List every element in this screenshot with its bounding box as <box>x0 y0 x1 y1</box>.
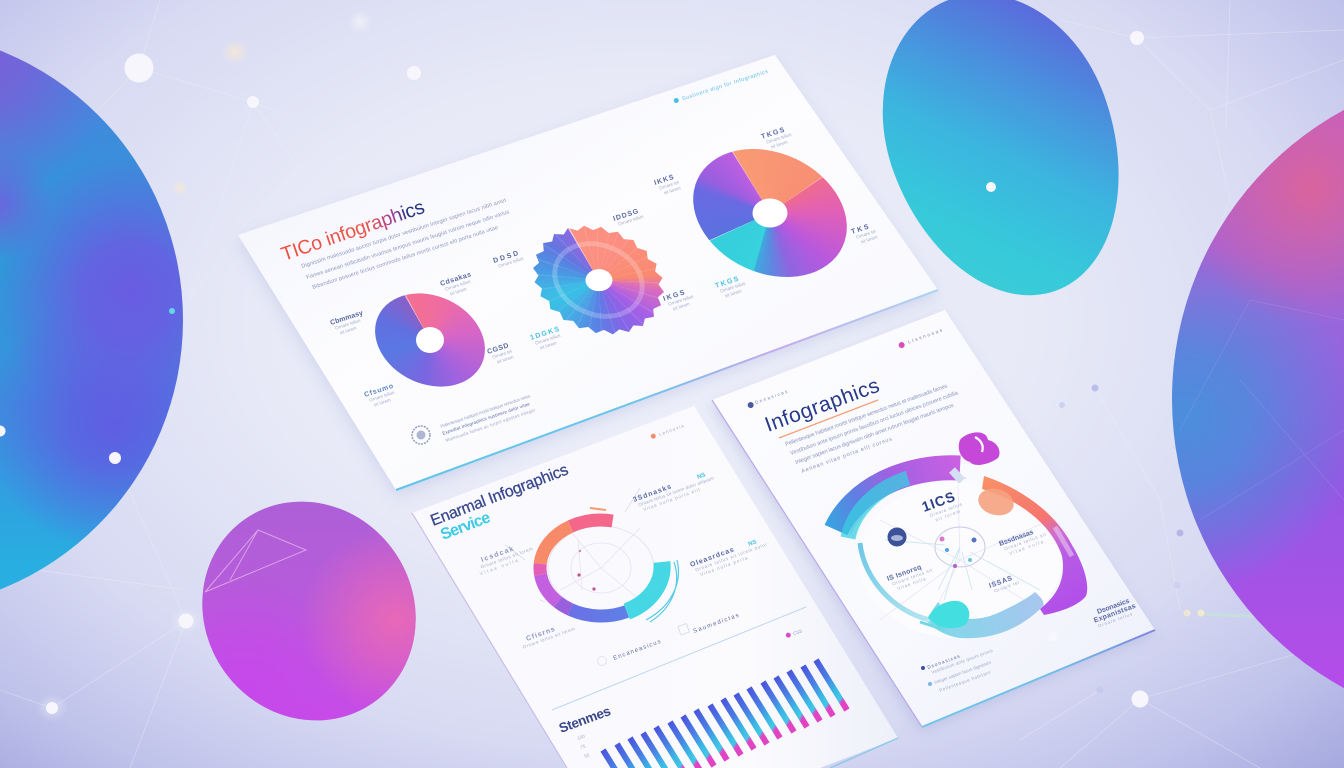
pie chart two burst <box>533 226 664 334</box>
label: pie one right: CGSD <box>486 342 510 356</box>
heading: Service <box>438 509 493 544</box>
label: donut right: Oleasrdcas <box>689 547 735 569</box>
label: pie three top <box>760 125 795 151</box>
label: pie one top: Ornare tellus <box>444 279 472 292</box>
blob: bottom-left magenta ellipse <box>202 502 416 720</box>
icon: purple blob <box>959 432 1000 465</box>
top note <box>898 327 944 349</box>
legend row: Saumedictas <box>693 613 740 635</box>
label: donut right: Ornare tellus sit lorem dolor <box>695 542 768 573</box>
label: donut left: Vitae nulla <box>479 558 519 576</box>
ring label: left: Vitae nulla <box>896 576 927 591</box>
label: pie three left: IKKS <box>653 174 675 187</box>
panel sheet <box>712 310 1155 727</box>
ring label: bottom <box>988 573 1020 595</box>
small kicker: Dnnasicas <box>754 389 789 405</box>
label: pie three top: sit lorem <box>770 139 788 150</box>
intro text: Dignissim malesuada auctor turpis dolor vestibulum integer sapien lacus nibh amet <box>301 198 508 270</box>
label: pie two right: Ornare tellus <box>667 294 695 307</box>
label: pie three top: Ornare tellus <box>765 132 793 145</box>
hub icons <box>940 536 976 568</box>
blob: top-right teal ellipse <box>845 0 1161 329</box>
footer text: Expediat Infographics sustinere dolor vitae <box>442 401 531 436</box>
label: pie three left <box>653 173 681 197</box>
blob: left blue-purple circle <box>0 30 183 610</box>
label: pie one bottom: Cfsumo <box>363 383 394 399</box>
label: pie one bottom: sit lorem <box>373 397 391 408</box>
ring label: right: Vitae nulla <box>1008 539 1044 556</box>
label: pie one left: sit lorem <box>339 325 357 336</box>
pie chart one <box>359 276 500 404</box>
intro text: Fames aenean sollicitudin vivamus tempus mauris feugiat rutrum neque odio varius <box>306 209 510 281</box>
label: donut top right <box>632 469 717 514</box>
panel: bottom left report: NS <box>697 472 707 481</box>
small kicker <box>747 389 789 409</box>
body text: Vestibulum ante ipsum primis faucibus orci luctus ultrices posuere cubilia <box>790 390 960 457</box>
label: pie two right: IKGS <box>662 289 686 303</box>
label: donut top right: Ornare tellus sit lorem dolor aliquam <box>638 475 715 508</box>
icon: navy badge <box>888 528 906 546</box>
icon: cyan blob <box>920 601 969 630</box>
icon: orange blob <box>975 485 1017 519</box>
label: lower right: Ornare tellus <box>1097 611 1134 629</box>
intro text: Bibendum posuere lectus commodo tellus morbi cursus elit porta nulla vitae <box>312 225 499 291</box>
label: pie one left: Ornare tellus <box>334 318 362 331</box>
body text: Aenean vitae porta elit cursus <box>801 436 893 475</box>
label: pie three top: TKGS <box>760 127 786 141</box>
axis labels: 100 <box>577 733 586 741</box>
top note: Lennoxia <box>658 423 685 437</box>
bar legend: CSS <box>792 628 803 636</box>
legend row: Encaneasicus <box>613 639 662 662</box>
body text: Pellentesque habitant morbi tristique senectus netus et malesuada fames <box>785 383 949 448</box>
label: lower right <box>1091 596 1139 629</box>
ring label: left <box>886 561 935 593</box>
top note: LIssnosas <box>907 327 943 345</box>
legend list: Integer sapien lacus dignissim <box>934 660 992 685</box>
ring label: top <box>920 487 965 525</box>
panel sheet <box>412 406 898 768</box>
axis labels <box>577 733 591 759</box>
legend list: Dsonasicas <box>927 653 961 670</box>
label: donut right <box>689 535 770 579</box>
label: pie two right <box>662 287 697 313</box>
panel: bottom left report: NS <box>748 539 758 548</box>
label: pie one top: sit lorem <box>449 286 467 297</box>
label: donut left: Icsdcak <box>480 546 515 564</box>
heading: Enarmal Infographics <box>428 462 571 530</box>
label: pie two bottom: Ornare tellus <box>534 333 562 346</box>
panel: top wide report <box>238 55 938 496</box>
label: pie three right: Ornare tel <box>855 229 876 240</box>
pie chart three <box>672 125 868 301</box>
bar chart <box>603 660 847 768</box>
label: pie three left: Ornare tel <box>658 180 679 191</box>
label: lower right: Dsonasics <box>1096 598 1131 616</box>
label: pie two bottom: sit lorem <box>539 340 557 351</box>
panel sheet <box>238 55 938 490</box>
label: pie two right: sit lorem <box>672 301 690 312</box>
top right note: Sustinere dign for Infographics <box>681 69 769 102</box>
ring label: right <box>998 525 1049 558</box>
label: pie two bottom: 1DGKS <box>529 326 560 342</box>
label: pie two top: Ornare tellus <box>617 214 645 227</box>
label: pie one right: sit lorem <box>496 354 514 365</box>
label: pie three bottom: TKGS <box>714 276 740 290</box>
label: donut left <box>475 539 535 576</box>
footer seal <box>412 426 430 444</box>
label: pie one right: Ornare tel <box>491 349 512 360</box>
label: pie two bottom <box>529 326 564 352</box>
label: donut bottom: Ornare tellus sit lorem <box>522 626 576 650</box>
label: donut top right: 3Sdnasks <box>632 484 672 504</box>
label: pie three bottom: sit lorem <box>724 288 742 299</box>
ring label: bottom: Ornare tel <box>994 580 1020 594</box>
legend list: Pellentesque habitant <box>939 670 992 693</box>
chart heading: Stenmes <box>557 703 613 736</box>
legend list <box>921 648 994 693</box>
panel: bottom right report <box>711 310 1156 731</box>
ring label: right: Bssdnasas <box>998 529 1035 548</box>
label: pie one top: Cdsakas <box>439 271 472 288</box>
label: pie two left <box>492 249 525 270</box>
label: pie one top <box>439 271 476 298</box>
label: pie two left: DDSD <box>492 250 519 265</box>
ring label: right: Ornare tellus sit <box>1004 532 1047 552</box>
label: donut left: Ornare tellus sit lorem <box>480 546 533 570</box>
donut chart <box>505 488 678 622</box>
label: pie one left <box>329 310 367 337</box>
label: pie three bottom: Ornare tellus <box>719 281 747 294</box>
legend row <box>598 613 740 666</box>
ring label: top: Ornare tellus <box>929 502 963 518</box>
label: pie three bottom <box>714 274 749 300</box>
label: pie three right: TKS <box>850 224 870 236</box>
body text: Integer sapien lacus dignissim nibh amet rutrum feugiat mauris tempus <box>795 403 955 466</box>
ring chart <box>836 468 1087 638</box>
label: pie two left: Ornare tellus <box>497 256 525 269</box>
ring label: bottom: ISSAS <box>988 575 1014 590</box>
footer text <box>440 393 537 443</box>
ring label: left: Ornare tellus sit <box>892 567 933 587</box>
label: pie two top: IDDSG <box>612 208 640 223</box>
footer text: Pellentesque habitant morbi tristique senectus netus <box>440 393 532 429</box>
label: donut bottom: Cfisrns <box>525 626 556 643</box>
label: pie three left: sit lorem <box>663 185 681 196</box>
bar legend <box>785 628 803 639</box>
ring label: left: IS Isnorsq <box>886 564 923 583</box>
top note <box>650 423 685 440</box>
blob: right pink-purple circle <box>1172 70 1344 728</box>
label: pie three right <box>850 222 878 246</box>
label: pie one bottom <box>363 383 398 409</box>
ring label: top: sit lorem <box>935 509 961 522</box>
label: pie one left: Cbmmasy <box>329 310 364 327</box>
label: pie two top <box>612 207 645 228</box>
label: pie three right: sit lorem <box>860 234 878 245</box>
label: donut top right: Vitae nulla porta elit <box>642 487 701 512</box>
label: lower right: Expanistsas <box>1093 603 1137 625</box>
ring label: top: 1ICS <box>920 488 957 515</box>
panel: bottom left report <box>412 406 898 768</box>
legend list: Vestibulum ante ipsum primis <box>931 648 994 675</box>
axis labels: 75 <box>580 743 587 750</box>
axis labels: 50 <box>584 752 591 759</box>
label: pie one bottom: Ornare tellus <box>368 390 396 403</box>
label: donut right: Vitae nulla porta <box>699 555 748 577</box>
heading: TICo infographics <box>278 196 428 266</box>
label: pie one right <box>486 342 514 366</box>
footer text: Malesuada fames ac turpis egestas integer <box>445 407 537 443</box>
heading: Infographics <box>762 374 882 437</box>
